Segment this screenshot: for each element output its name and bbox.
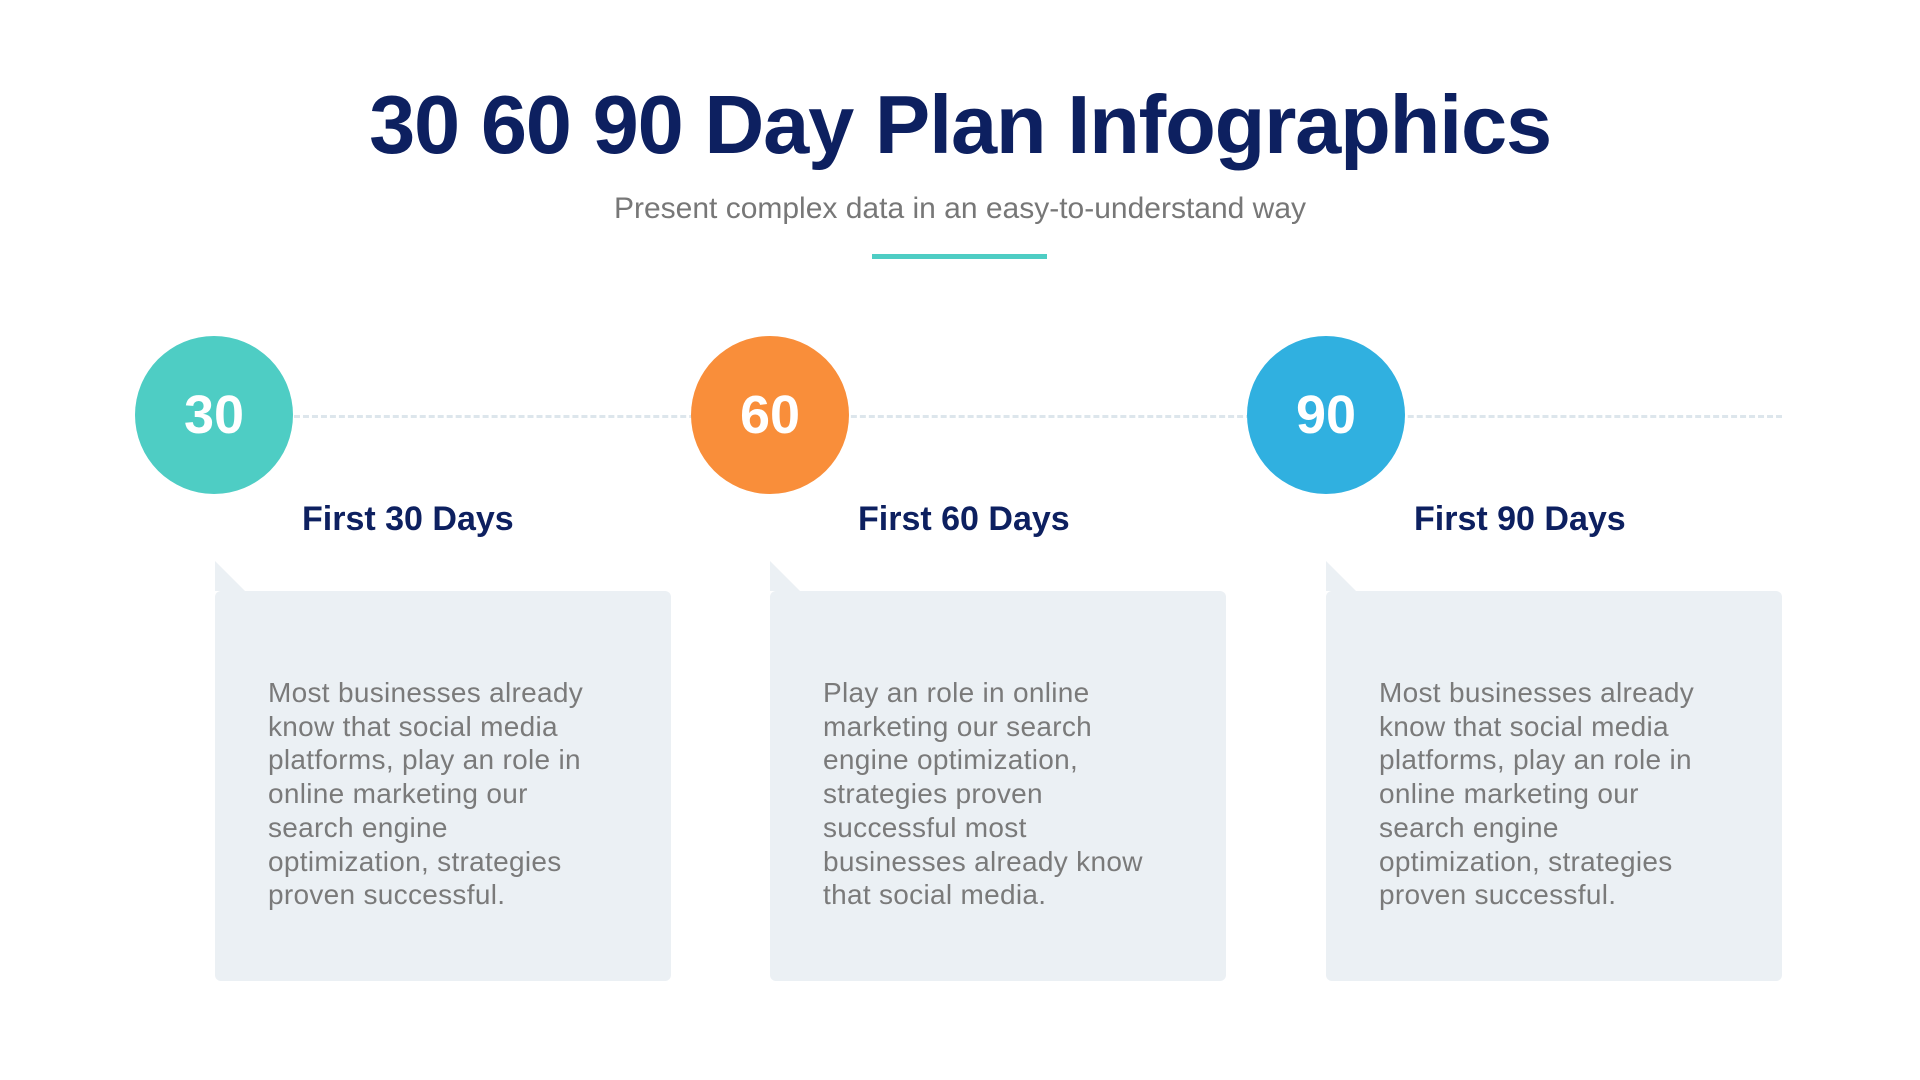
card 30: know that social media bbox=[268, 711, 558, 742]
card 30: optimization, strategies bbox=[268, 846, 562, 877]
circle 30 bbox=[135, 336, 293, 494]
circle 90 bbox=[1247, 336, 1405, 494]
circle 60 bbox=[691, 336, 849, 494]
card 90: Most businesses already bbox=[1379, 677, 1694, 708]
card 60: marketing our search bbox=[823, 711, 1092, 742]
card 90: know that social media bbox=[1379, 711, 1669, 742]
card 30: platforms, play an role in bbox=[268, 744, 581, 775]
circle 30: 30 bbox=[184, 385, 244, 445]
card 90: online marketing our bbox=[1379, 778, 1639, 809]
card 60 bbox=[770, 561, 1226, 981]
card 90: platforms, play an role in bbox=[1379, 744, 1692, 775]
heading 60: First 60 Days bbox=[858, 500, 1070, 538]
subtitle: Present complex data in an easy-to-understand way bbox=[614, 192, 1306, 225]
dashed timeline bbox=[294, 415, 1782, 418]
title: 30 60 90 Day Plan Infographics bbox=[369, 78, 1551, 171]
card 30 bbox=[215, 561, 671, 981]
card 60: Play an role in online bbox=[823, 677, 1090, 708]
card 30: search engine bbox=[268, 812, 448, 843]
card 60: successful most bbox=[823, 812, 1027, 843]
circle 60: 60 bbox=[740, 385, 800, 445]
heading 90: First 90 Days bbox=[1414, 500, 1626, 538]
card 90: proven successful. bbox=[1379, 879, 1616, 910]
circle 90: 90 bbox=[1296, 385, 1356, 445]
card 60: strategies proven bbox=[823, 778, 1043, 809]
card 60: businesses already know bbox=[823, 846, 1143, 877]
card 30: online marketing our bbox=[268, 778, 528, 809]
card 90: search engine bbox=[1379, 812, 1559, 843]
card 90: optimization, strategies bbox=[1379, 846, 1673, 877]
card 60: engine optimization, bbox=[823, 744, 1078, 775]
card 30: Most businesses already bbox=[268, 677, 583, 708]
card 60: that social media. bbox=[823, 879, 1046, 910]
card 90 bbox=[1326, 561, 1782, 981]
card 30: proven successful. bbox=[268, 879, 505, 910]
heading 30: First 30 Days bbox=[302, 500, 514, 538]
